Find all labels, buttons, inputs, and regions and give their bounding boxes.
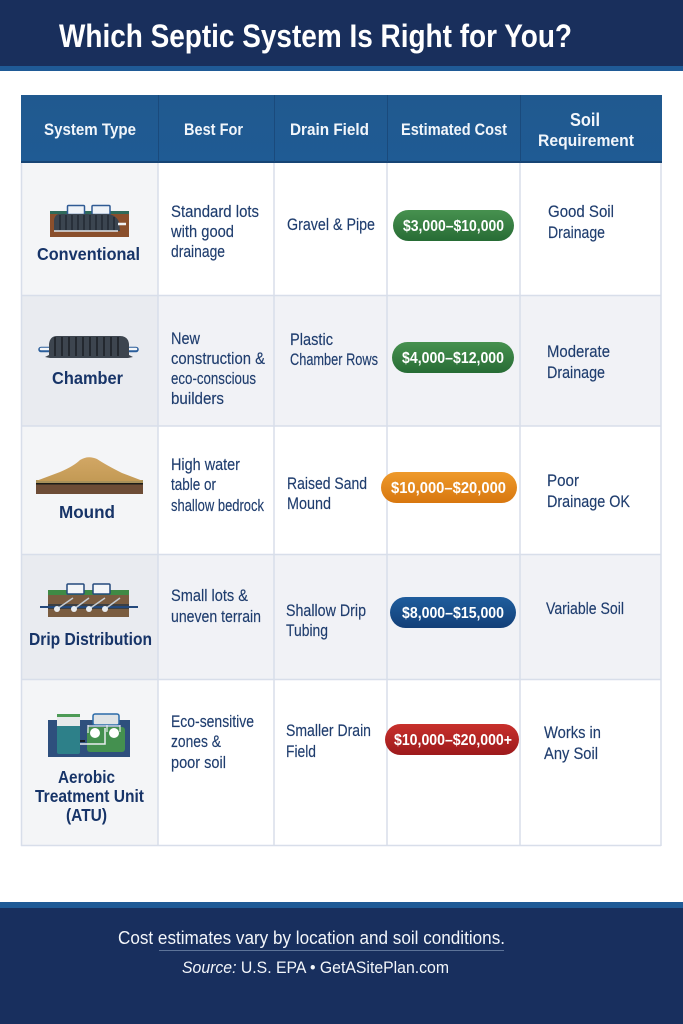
soil: mound: Poor xyxy=(547,471,579,490)
drain field: drip distribution: Tubing xyxy=(286,621,328,640)
soil: aerobic treatment unit: Works in xyxy=(544,723,601,742)
best for: aerobic treatment unit xyxy=(171,712,254,772)
cost pill: chamber xyxy=(392,342,514,373)
header banner xyxy=(0,0,683,71)
soil: mound: Drainage OK xyxy=(547,492,631,511)
icon: conventional system xyxy=(50,206,129,237)
soil: chamber xyxy=(547,342,610,382)
row: mound xyxy=(36,455,631,522)
drain field: aerobic treatment unit xyxy=(286,721,371,761)
label: chamber: Chamber xyxy=(52,368,123,388)
soil: chamber: Moderate xyxy=(547,342,610,361)
label: aerobic treatment unit xyxy=(35,767,144,825)
table row backgrounds xyxy=(21,163,661,846)
icon: aerobic treatment unit xyxy=(48,714,130,757)
best for: conventional: drainage xyxy=(171,242,225,261)
icon: mound xyxy=(36,457,143,494)
drain field: mound: Raised Sand xyxy=(287,474,367,493)
cost pill: aerobic treatment unit: $10,000–$20,000+ xyxy=(394,732,512,749)
icon: chamber system xyxy=(41,336,136,358)
best for: conventional: with good xyxy=(170,222,234,241)
footer note: Cost estimates vary by location and soil conditions. xyxy=(118,928,505,948)
column heading: drain field: Drain Field xyxy=(290,121,369,139)
cost pill: mound: $10,000–$20,000 xyxy=(391,480,506,497)
drain field: mound: Mound xyxy=(287,494,331,513)
cost pill: drip distribution xyxy=(390,597,516,628)
drain field: chamber: Chamber Rows xyxy=(290,350,378,369)
cost pill: aerobic treatment unit xyxy=(385,724,519,755)
label: drip distribution: Drip Distribution xyxy=(29,629,152,649)
cost pill: drip distribution: $8,000–$15,000 xyxy=(402,605,504,622)
best for: mound: High water xyxy=(171,455,240,474)
row: chamber xyxy=(41,329,610,408)
title: Which Septic System Is Right for You? xyxy=(59,18,572,54)
soil: aerobic treatment unit: Any Soil xyxy=(544,744,598,763)
soil: conventional: Good Soil xyxy=(548,202,614,221)
source line: Source: U.S. EPA • GetASitePlan.com xyxy=(182,958,449,977)
label: aerobic treatment unit: (ATU) xyxy=(66,805,107,825)
drain field: drip distribution: Shallow Drip xyxy=(286,601,366,620)
icon: drip distribution xyxy=(40,584,138,617)
best for: chamber: New xyxy=(171,329,201,348)
footer band xyxy=(0,902,683,1024)
drain field: chamber xyxy=(290,330,378,369)
best for: aerobic treatment unit: Eco-sensitive xyxy=(171,712,254,731)
best for: conventional: Standard lots xyxy=(171,202,259,221)
best for: chamber: eco-conscious xyxy=(171,369,256,388)
column heading: best for: Best For xyxy=(184,121,244,139)
drain field: aerobic treatment unit: Smaller Drain xyxy=(286,721,371,740)
best for: chamber: construction & xyxy=(171,349,266,368)
best for: aerobic treatment unit: zones & xyxy=(171,732,222,751)
table header row xyxy=(21,95,662,163)
drain field: drip distribution xyxy=(286,601,366,640)
best for: chamber: builders xyxy=(171,389,224,408)
column heading: estimated cost: Estimated Cost xyxy=(401,121,507,139)
best for: mound xyxy=(171,455,264,515)
column heading: soil requirement: Soil xyxy=(570,110,600,130)
row: drip distribution xyxy=(29,584,624,649)
best for: aerobic treatment unit: poor soil xyxy=(171,753,226,772)
cost pill: conventional: $3,000–$10,000 xyxy=(403,218,504,235)
column heading: system type: System Type xyxy=(44,121,136,139)
best for: drip distribution xyxy=(171,586,261,626)
best for: chamber xyxy=(171,329,266,408)
soil: aerobic treatment unit xyxy=(544,723,601,763)
cost pill: chamber: $4,000–$12,000 xyxy=(402,350,504,367)
label: mound: Mound xyxy=(59,502,115,522)
column heading: soil requirement: Requirement xyxy=(538,132,634,150)
label: aerobic treatment unit: Aerobic xyxy=(58,767,115,787)
drain field: mound xyxy=(287,474,367,513)
soil: drip distribution: Variable Soil xyxy=(546,599,624,618)
soil: mound xyxy=(547,471,631,511)
row: conventional xyxy=(37,202,614,264)
soil: conventional xyxy=(548,202,614,242)
drain field: aerobic treatment unit: Field xyxy=(286,742,316,761)
best for: mound: table or xyxy=(171,475,216,494)
label: conventional: Conventional xyxy=(37,244,140,264)
best for: drip distribution: uneven terrain xyxy=(171,607,261,626)
cost pill: conventional xyxy=(393,210,514,241)
column heading: soil requirement xyxy=(538,110,634,150)
soil: conventional: Drainage xyxy=(548,223,605,242)
cost pill: mound xyxy=(381,472,517,503)
best for: mound: shallow bedrock xyxy=(171,496,264,515)
best for: drip distribution: Small lots & xyxy=(171,586,249,605)
soil: chamber: Drainage xyxy=(547,363,605,382)
row: aerobic treatment unit xyxy=(35,712,601,825)
best for: conventional xyxy=(170,202,259,261)
label: aerobic treatment unit: Treatment Unit xyxy=(35,786,144,806)
drain field: conventional: Gravel & Pipe xyxy=(287,215,375,234)
drain field: chamber: Plastic xyxy=(290,330,333,349)
